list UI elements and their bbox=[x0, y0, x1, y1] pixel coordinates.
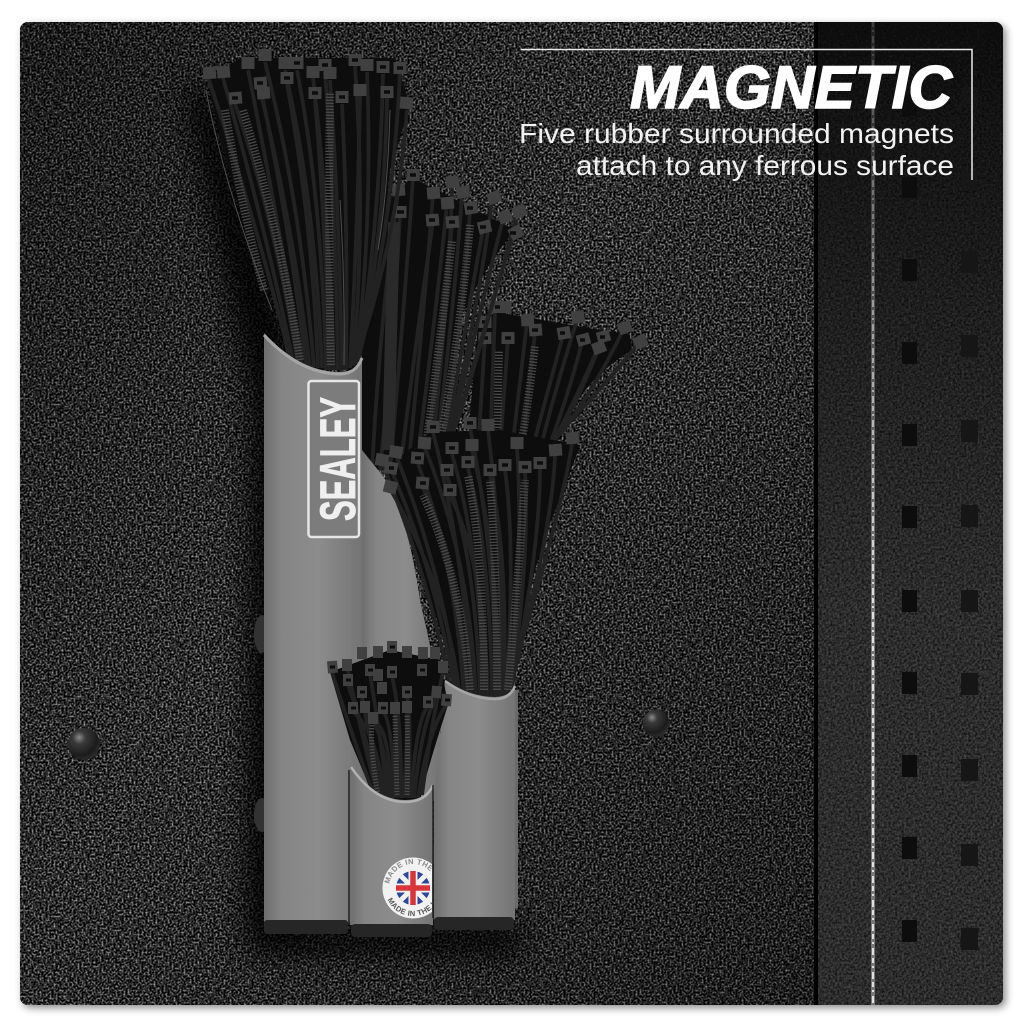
bundle 1: longest ties, front left bbox=[206, 49, 410, 370]
magnet stud left bbox=[68, 728, 100, 760]
bundle 5: short ties, front bbox=[330, 641, 450, 800]
Made in the UK sticker bbox=[382, 858, 432, 918]
tube 2: rear holder bbox=[362, 450, 440, 800]
bundle 3: medium ties, rear bbox=[468, 301, 649, 440]
textured cabinet surface bbox=[20, 22, 816, 1005]
subtitle line 2: attach to any ferrous surface bbox=[576, 150, 954, 181]
SEALEY brand label: SEALEY bbox=[310, 397, 366, 521]
tube 1: tall holder bbox=[264, 333, 366, 934]
bundle 2: long ties, middle bbox=[362, 169, 522, 470]
bundle 4: medium ties, front bbox=[381, 417, 580, 697]
cast shadows behind holder bbox=[185, 90, 520, 955]
subtitle line 1: Five rubber surrounded magnets bbox=[519, 118, 954, 149]
tube rear magnets bbox=[254, 615, 264, 832]
title: MAGNETIC bbox=[630, 54, 954, 121]
tube 4: small front holder bbox=[348, 766, 434, 937]
callout frame lines bbox=[521, 50, 972, 180]
magnet stud right bbox=[642, 710, 670, 736]
tube 3: short right holder bbox=[434, 680, 518, 930]
side channel and pegboard strip bbox=[814, 22, 1003, 1005]
SEALEY brand label bbox=[308, 381, 366, 537]
Made in the UK sticker: MADE IN THE UK bbox=[384, 858, 432, 884]
pegboard holes bbox=[902, 87, 978, 950]
Made in the UK sticker: MADE IN THE UK bbox=[388, 898, 432, 916]
